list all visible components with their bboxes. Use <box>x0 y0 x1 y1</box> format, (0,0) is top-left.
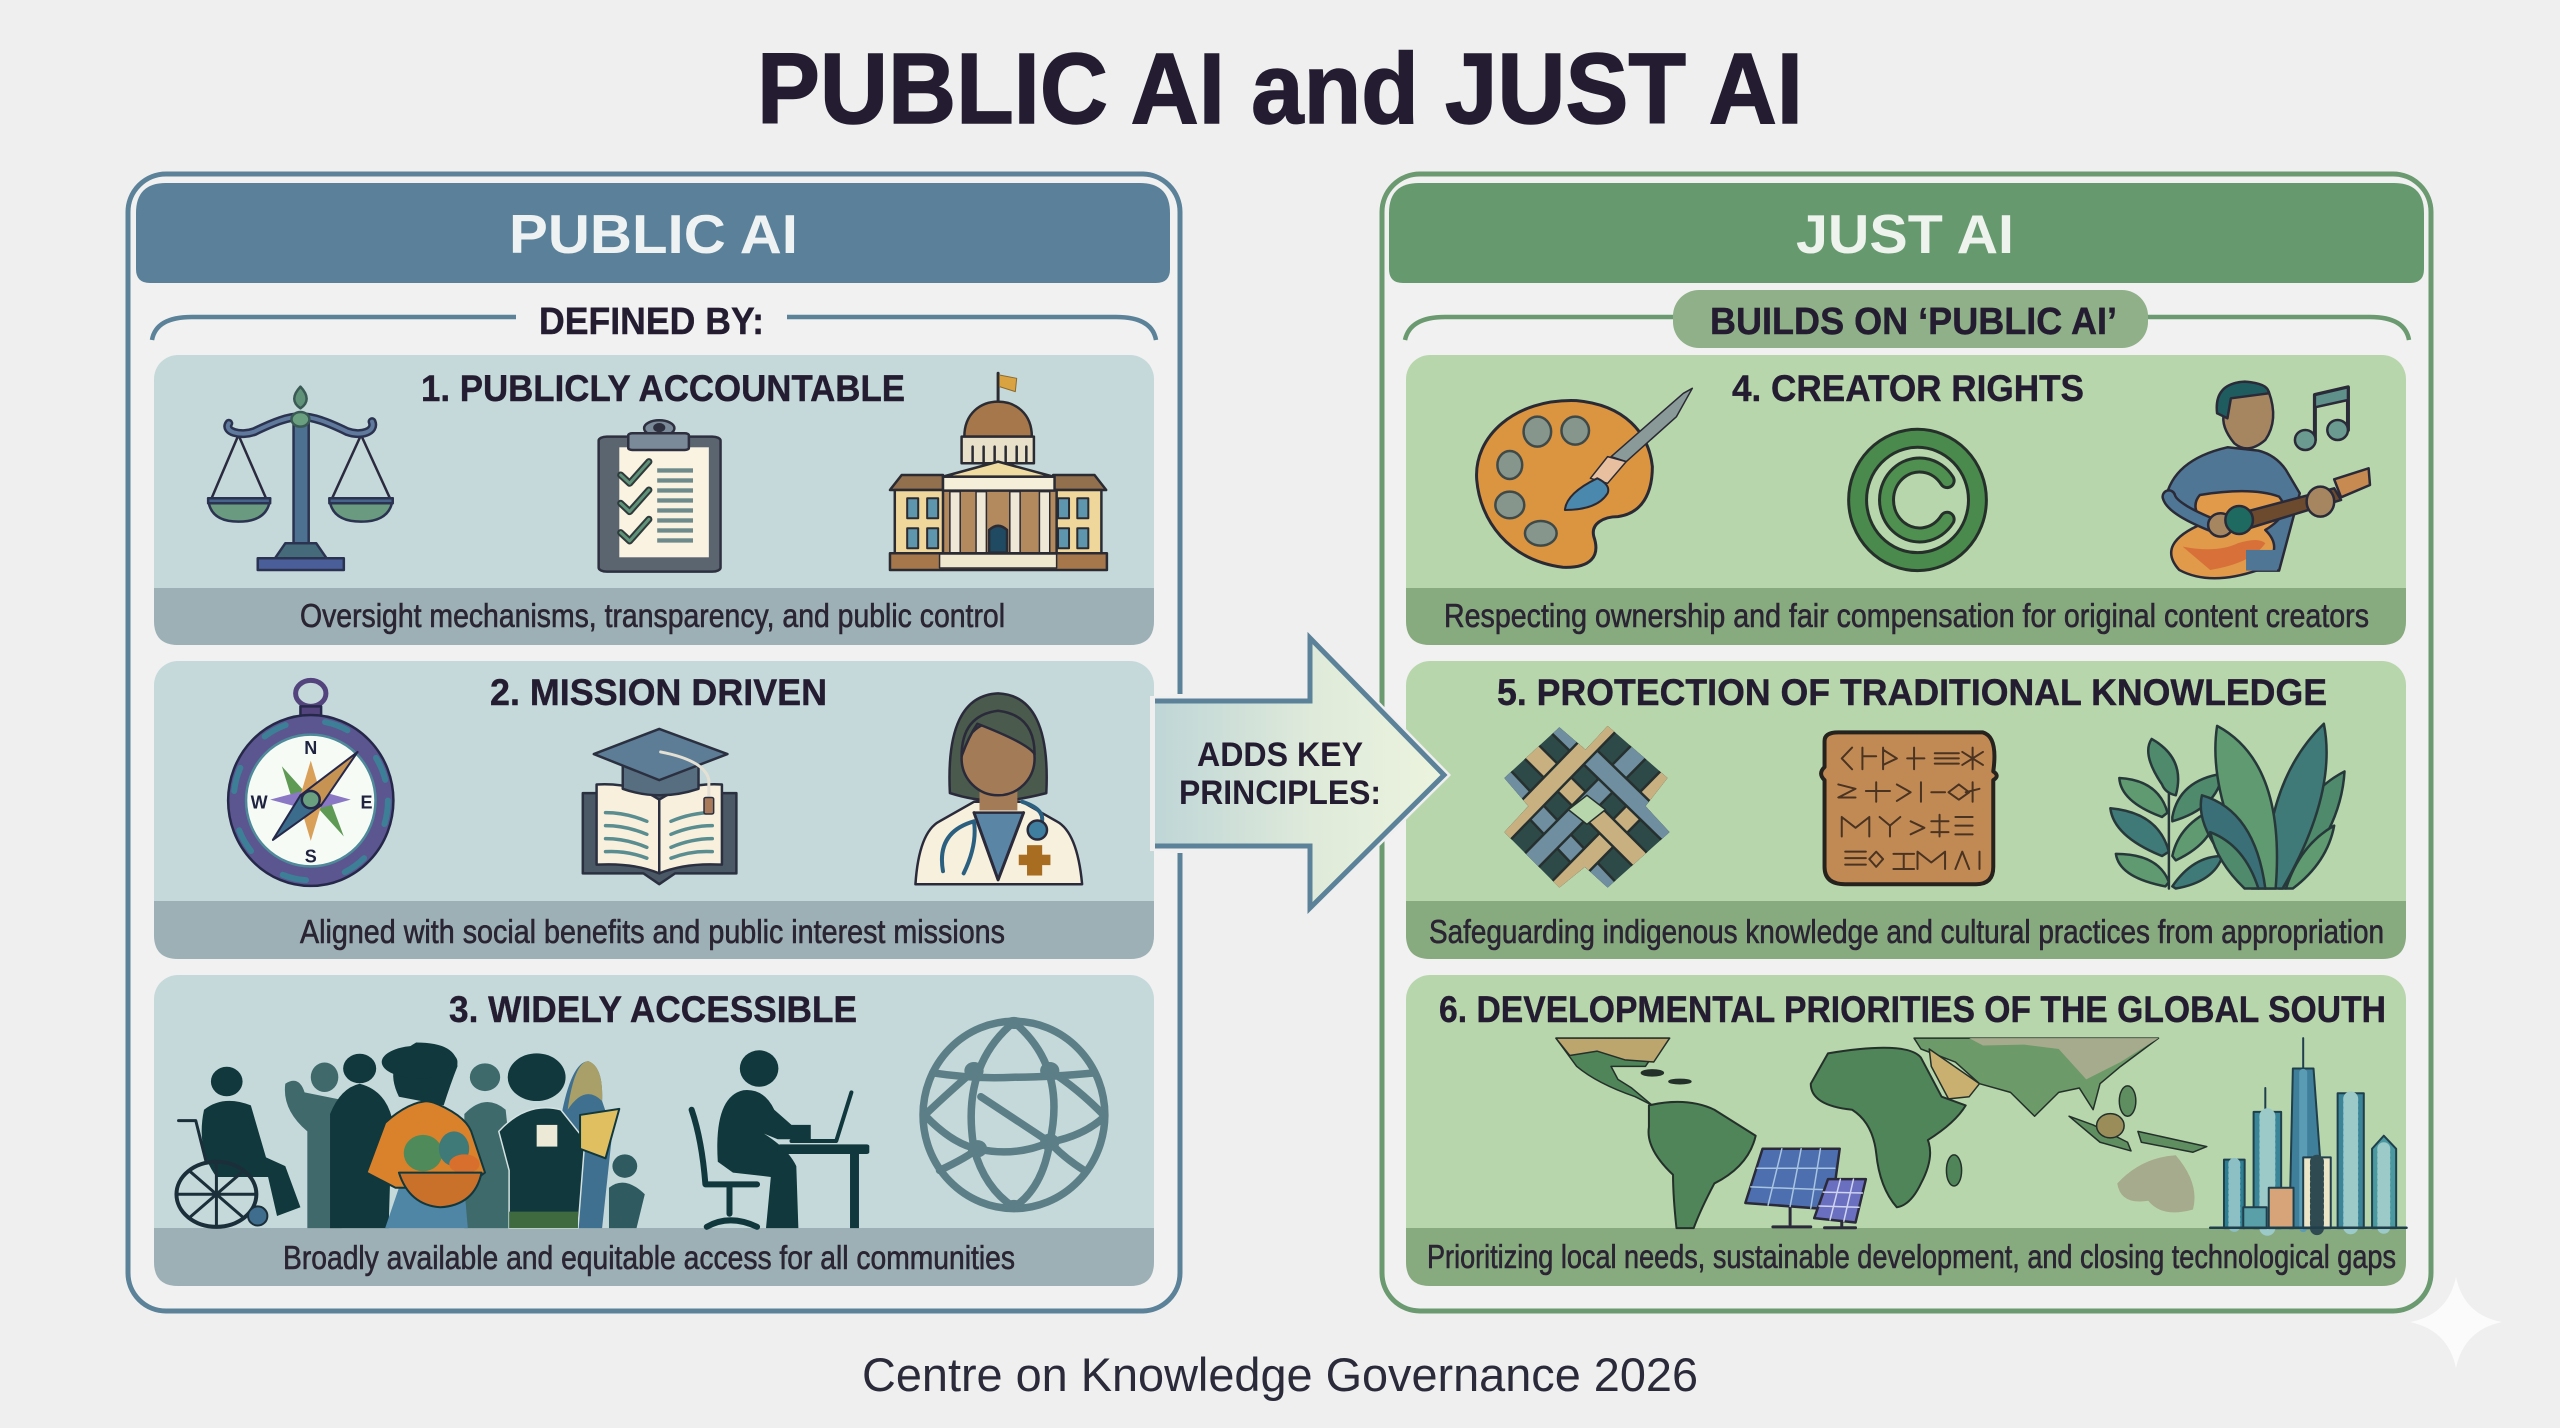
map: global south world map <box>1556 1038 2207 1228</box>
card 4 caption: Respecting ownership and fair compensation for original content creators <box>1444 597 2369 634</box>
icon: clipboard checklist <box>599 420 721 572</box>
icon: woven pattern <box>1501 724 1673 891</box>
icon: person at laptop <box>692 1050 869 1228</box>
panel frame <box>128 174 1180 1311</box>
card 5 caption: Safeguarding indigenous knowledge and cultural practices from appropriation <box>1429 913 2384 950</box>
card 2 caption: Aligned with social benefits and public interest missions <box>300 913 1005 950</box>
card 3 caption: Broadly available and equitable access for all communities <box>283 1239 1015 1276</box>
sparkle watermark <box>2410 1277 2502 1368</box>
card 1: publicly accountable <box>154 355 1154 645</box>
icon: compass: N <box>304 738 317 758</box>
card 1 caption: Oversight mechanisms, transparency, and public control <box>300 597 1005 634</box>
icon: scales of justice <box>208 387 393 570</box>
builds on public ai badge: BUILDS ON ‘PUBLIC AI’ <box>1710 301 2117 343</box>
card 4 heading: 4. CREATOR RIGHTS <box>1732 368 2084 409</box>
defined by heading: DEFINED BY: <box>539 301 764 343</box>
icon: compass: S <box>305 847 317 867</box>
header: just ai <box>1389 183 2424 283</box>
icon: solar panels <box>1745 1149 1866 1228</box>
builds on public ai badge <box>1405 290 2409 348</box>
title: PUBLIC AI and JUST AI <box>757 33 1803 145</box>
card 6: developmental priorities of the global south <box>1406 975 2406 1286</box>
icon: painter's palette <box>1477 388 1692 567</box>
icon: doctor <box>915 693 1082 884</box>
header: just ai: JUST AI <box>1796 203 2014 265</box>
icon: copyright symbol <box>1849 429 1986 571</box>
arrow: adds key principles: PRINCIPLES: <box>1179 774 1381 812</box>
arrow: adds key principles <box>1155 638 1444 908</box>
panel: just ai <box>1382 174 2431 1311</box>
header: public ai <box>136 183 1170 283</box>
cover for border gap around arrow <box>1170 694 1190 853</box>
card 3 heading: 3. WIDELY ACCESSIBLE <box>449 989 857 1030</box>
card 3: widely accessible <box>154 975 1154 1286</box>
icon: guitarist with music note <box>2165 382 2370 578</box>
card 5 heading: 5. PROTECTION OF TRADITIONAL KNOWLEDGE <box>1497 672 2327 713</box>
card 5: protection of traditional knowledge <box>1406 661 2406 959</box>
header: public ai: PUBLIC AI <box>509 203 798 265</box>
panel: public ai <box>128 174 1180 1311</box>
defined by heading <box>152 301 1156 343</box>
arrow: adds key principles: ADDS KEY <box>1197 736 1363 774</box>
panel frame <box>1382 174 2431 1311</box>
icon: medicinal plants <box>2110 724 2345 889</box>
icon: book and graduation cap <box>583 729 736 884</box>
icon: engraved tablet <box>1821 732 1997 884</box>
icon: compass: E <box>361 792 373 812</box>
icon: compass: W <box>251 792 268 812</box>
card 4: creator rights <box>1406 355 2406 645</box>
icon: diverse community silhouettes <box>176 1042 645 1228</box>
icon: government building <box>890 373 1107 570</box>
card 1 heading: 1. PUBLICLY ACCOUNTABLE <box>421 368 905 409</box>
card 2: mission driven <box>154 661 1154 959</box>
footer credit: Centre on Knowledge Governance 2026 <box>862 1348 1698 1401</box>
card 2 heading: 2. MISSION DRIVEN <box>490 672 827 713</box>
icon: city skyline <box>2210 1038 2406 1228</box>
card 6 heading: 6. DEVELOPMENTAL PRIORITIES OF THE GLOBAL SOUTH <box>1439 989 2386 1030</box>
icon: network globe <box>923 1017 1105 1212</box>
icon: compass <box>228 680 393 886</box>
